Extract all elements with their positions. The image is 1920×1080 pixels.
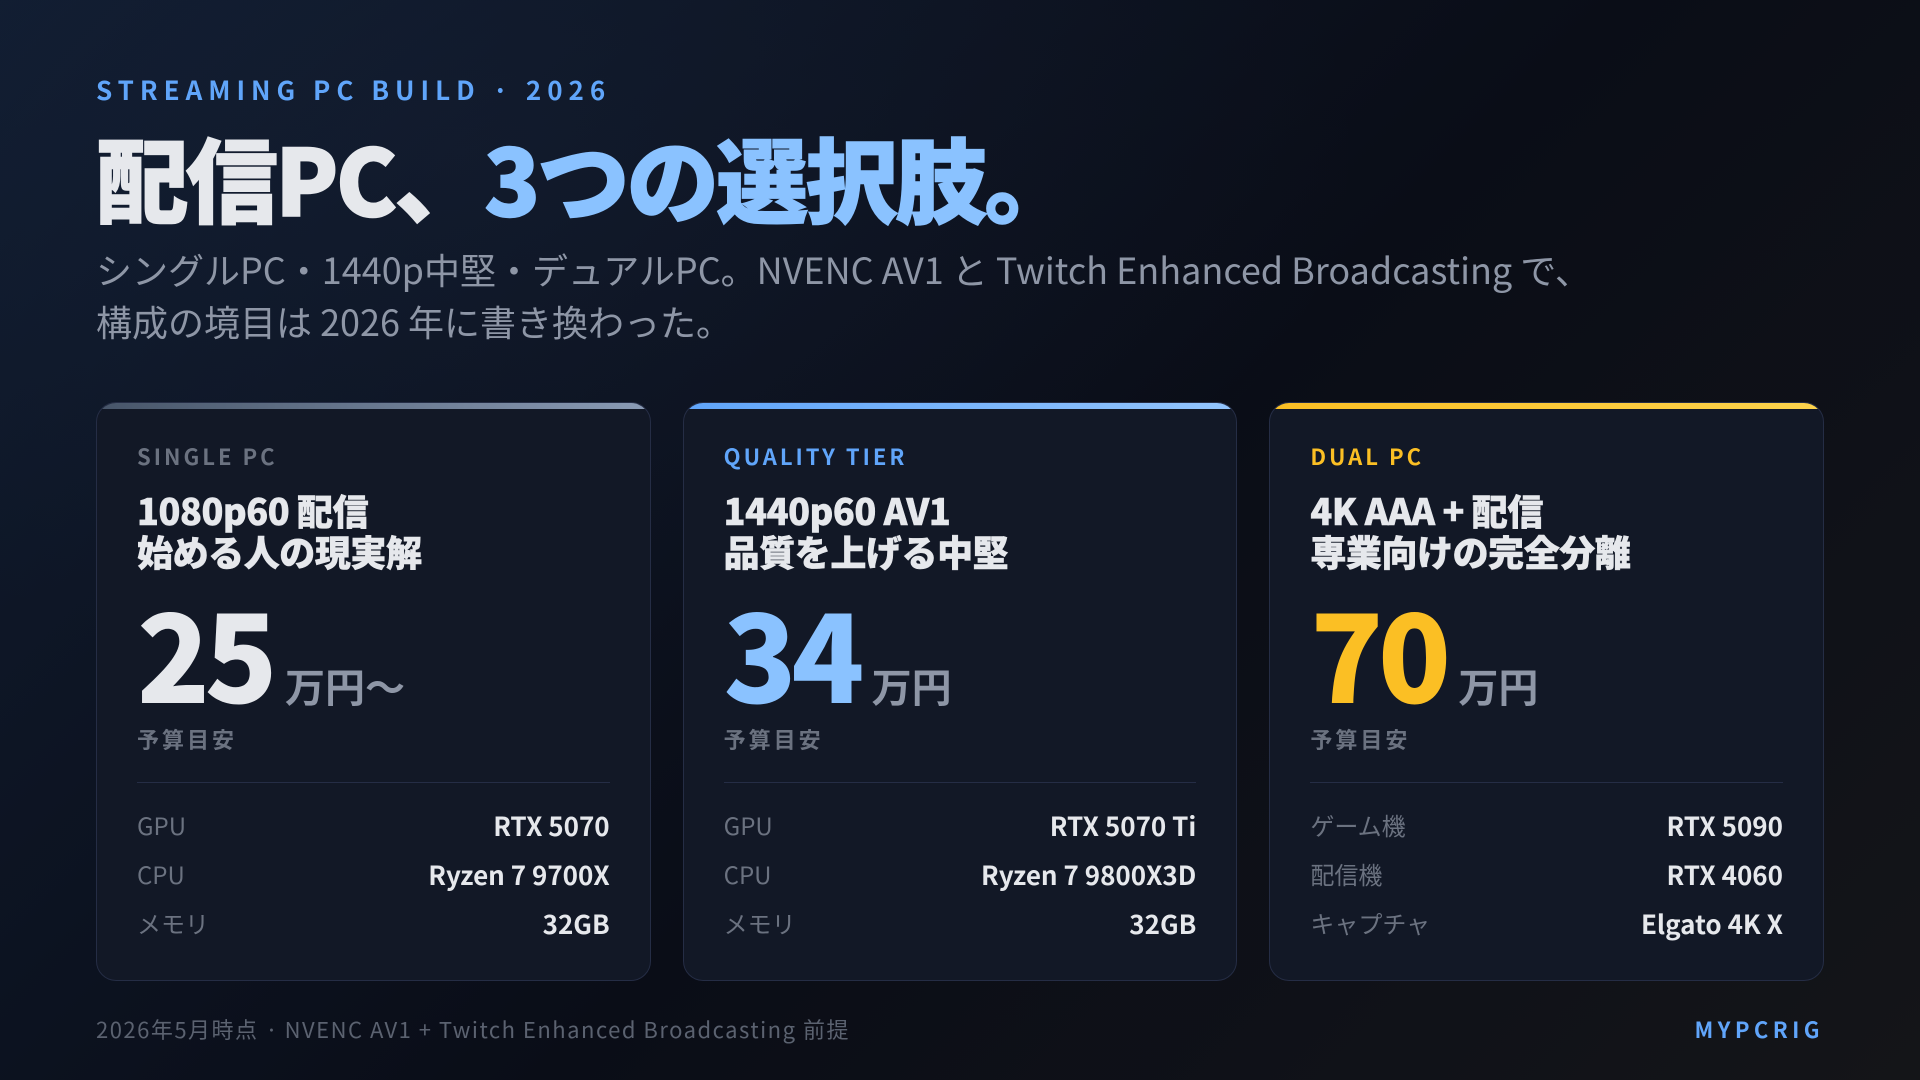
spec: CPU: Ryzen 7 9800X3D bbox=[981, 856, 1196, 893]
spec: capture: Elgato 4K X bbox=[1641, 905, 1783, 942]
spec: streaming PC: 配信機 bbox=[1310, 856, 1382, 891]
label: QUALITY TIER bbox=[724, 440, 907, 472]
spec: capture bbox=[1310, 905, 1783, 942]
budget caption: 予算目安 bbox=[1310, 723, 1410, 755]
price unit: 万円 bbox=[872, 656, 952, 714]
accent bar: amber bbox=[1270, 403, 1823, 409]
eyebrow: STREAMING PC BUILD · 2026 bbox=[96, 71, 611, 108]
panel: quality tier bbox=[683, 402, 1237, 981]
spec: game PC bbox=[1310, 807, 1783, 844]
price unit: 万円〜 bbox=[285, 656, 405, 714]
budget caption: 予算目安 bbox=[724, 723, 824, 755]
price: 34 bbox=[724, 564, 859, 738]
spec: GPU bbox=[724, 807, 1196, 844]
spec: capture: キャプチャ bbox=[1310, 905, 1430, 940]
card heading: 専業向けの完全分離 bbox=[1310, 525, 1630, 577]
spec: GPU: GPU bbox=[137, 807, 186, 842]
card heading: 始める人の現実解 bbox=[137, 525, 422, 577]
subtitle bbox=[96, 243, 1591, 347]
spec: CPU: Ryzen 7 9700X bbox=[428, 856, 610, 893]
spec: CPU: CPU bbox=[137, 856, 185, 891]
spec: memory: 32GB bbox=[1129, 905, 1196, 942]
price unit: 万円 bbox=[1458, 656, 1538, 714]
accent bar: grey bbox=[97, 403, 650, 409]
footer note: · bbox=[265, 1013, 278, 1045]
footer note: 2026年5月時点 NVENC AV1 + Twitch Enhanced Broadcasting 前提 bbox=[96, 1013, 850, 1045]
label: DUAL PC bbox=[1310, 440, 1424, 472]
spec: game PC: RTX 5090 bbox=[1667, 807, 1783, 844]
spec: memory: 32GB bbox=[543, 905, 610, 942]
card heading bbox=[724, 484, 1008, 577]
spec: GPU bbox=[137, 807, 610, 844]
card heading: 1440p60 AV1 bbox=[724, 484, 950, 536]
spec: memory bbox=[724, 905, 1196, 942]
budget caption: 予算目安 bbox=[137, 723, 237, 755]
accent bar: blue bbox=[684, 403, 1236, 409]
price: 70 bbox=[1310, 564, 1446, 738]
spec: memory: メモリ bbox=[137, 905, 209, 940]
spec: GPU: GPU bbox=[724, 807, 773, 842]
spec: GPU: RTX 5070 bbox=[493, 807, 610, 844]
label: SINGLE PC bbox=[137, 440, 278, 472]
card heading bbox=[1310, 484, 1630, 577]
card heading: 4K AAA + 配信 bbox=[1310, 484, 1543, 536]
spec: streaming PC bbox=[1310, 856, 1783, 893]
price: 25 bbox=[137, 564, 272, 738]
brand: MYPCRIG bbox=[1695, 1013, 1824, 1045]
spec: memory: メモリ bbox=[724, 905, 796, 940]
spec: GPU: RTX 5070 Ti bbox=[1050, 807, 1196, 844]
spec: streaming PC: RTX 4060 bbox=[1667, 856, 1783, 893]
card heading bbox=[137, 484, 422, 577]
title: 配信PC、3つの選択肢。 bbox=[96, 110, 1074, 243]
panel: dual PC bbox=[1269, 402, 1824, 981]
subtitle: シングルPC・1440p中堅・デュアルPC。NVENC AV1 と Twitch Enhanced Broadcasting で、 bbox=[96, 243, 1591, 295]
panel: single PC bbox=[96, 402, 651, 981]
subtitle: 構成の境目は 2026 年に書き換わった。 bbox=[96, 295, 732, 347]
spec: memory bbox=[137, 905, 610, 942]
card heading: 品質を上げる中堅 bbox=[724, 525, 1008, 577]
spec: CPU bbox=[724, 856, 1196, 893]
spec: CPU: CPU bbox=[724, 856, 771, 891]
spec: CPU bbox=[137, 856, 610, 893]
card heading: 1080p60 配信 bbox=[137, 484, 368, 536]
spec: game PC: ゲーム機 bbox=[1310, 807, 1406, 842]
